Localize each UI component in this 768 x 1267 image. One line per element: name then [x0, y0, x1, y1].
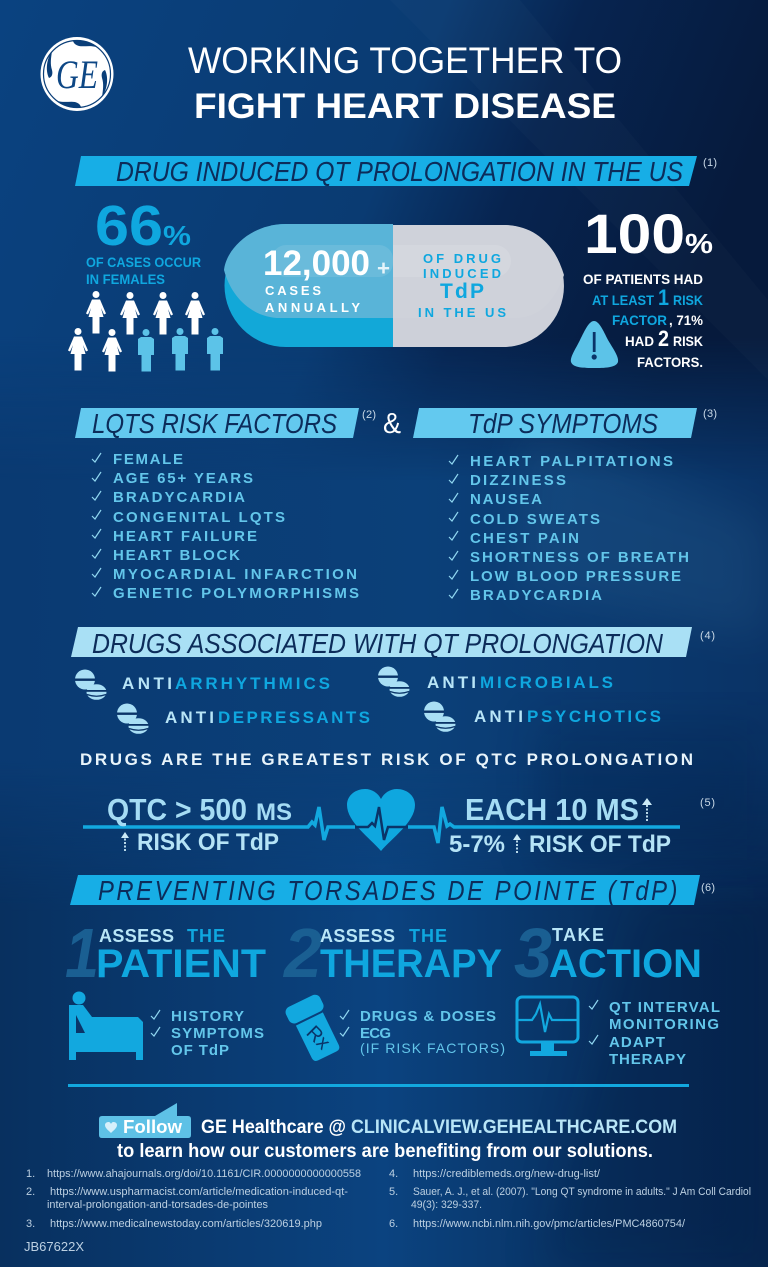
icon: GE logo — [40, 37, 114, 111]
checklist: therapy: (IF RISK FACTORS) — [360, 1040, 505, 1056]
capsule: 12,000+ cases: IN THE US — [418, 305, 506, 320]
checklist: action: ADAPT — [609, 1034, 665, 1051]
references: right: Sauer, A. J., et al. (2007). "Long QT syndrome in adults." J Am Coll Cardiol — [413, 1186, 751, 1198]
list: symptoms: LOW BLOOD PRESSURE — [470, 568, 681, 585]
checklist: patient: SYMPTOMS — [171, 1025, 264, 1042]
list: risk factors: CONGENITAL LQTS — [113, 509, 285, 526]
list: risk factors: FEMALE — [113, 451, 183, 468]
references: left: https://www.medicalnewstoday.com/articles/320619.php — [50, 1218, 322, 1230]
stat: each 10 ms: 5-7% — [449, 831, 505, 858]
stat: 100 percent: RISK — [673, 292, 703, 308]
stat: each 10 ms: (5) — [700, 797, 715, 809]
list: symptoms: SHORTNESS OF BREATH — [470, 549, 689, 566]
stat: 100 percent: 100 — [584, 202, 685, 265]
stat: each 10 ms — [449, 792, 715, 858]
icon: warning — [571, 321, 618, 368]
references: right: https://www.ncbi.nlm.nih.gov/pmc/articles/PMC4860754/ — [413, 1218, 686, 1230]
stat: each 10 ms: RISK OF TdP — [529, 831, 671, 858]
drug class: antimicrobials — [378, 666, 613, 697]
drug class: antiarrhythmics — [75, 670, 330, 700]
drug class: antipsychotics — [424, 702, 661, 732]
heading: drugs associated: (4) — [700, 630, 715, 642]
heading: drugs associated: DRUGS ASSOCIATED WITH QT PROLONGATION — [92, 628, 664, 659]
drug class: antidepressants — [117, 704, 370, 734]
step 2: assess the therapy: ASSESS — [320, 926, 395, 946]
stat: 66 percent: 66 — [95, 194, 163, 258]
checklist: therapy: ECG — [360, 1025, 391, 1042]
icon: people — [68, 291, 223, 372]
list: symptoms: NAUSEA — [470, 491, 542, 508]
capsule: 12,000+ cases: OF DRUG — [423, 251, 501, 266]
document code: JB67622X — [24, 1239, 84, 1254]
stat: 100 percent: OF PATIENTS HAD — [583, 271, 703, 287]
step 1: assess the patient — [65, 914, 266, 992]
title: WORKING TOGETHER TO — [188, 40, 622, 81]
list: risk factors — [92, 451, 359, 602]
stat: 100 percent — [583, 202, 713, 370]
heading: TdP symptoms: (3) — [703, 408, 717, 420]
list: symptoms: DIZZINESS — [470, 472, 566, 489]
follow button: Follow — [123, 1117, 183, 1137]
capsule: 12,000+ cases: + — [377, 257, 390, 280]
step 1: assess the patient: 1 — [65, 914, 99, 992]
references: left: 3. — [26, 1218, 35, 1230]
list: risk factors: MYOCARDIAL INFARCTION — [113, 566, 357, 583]
list: symptoms: CHEST PAIN — [470, 530, 579, 547]
step 1: assess the patient: PATIENT — [96, 942, 266, 986]
stat: QTc over 500 ms: QTC > 500 — [107, 792, 247, 827]
icon: ECG monitor — [517, 997, 578, 1056]
step 3: take action — [514, 914, 702, 992]
stat: 66 percent — [86, 194, 201, 287]
step 2: assess the therapy: THERAPY — [320, 942, 502, 986]
list: symptoms: COLD SWEATS — [470, 511, 600, 528]
step 2: assess the therapy: 2 — [282, 914, 322, 992]
capsule: 12,000+ cases: TdP — [440, 280, 484, 303]
references: left: interval-prolongation-and-torsades-de-pointes — [47, 1199, 268, 1211]
references: left: https://www.uspharmacist.com/article/medication-induced-qt- — [50, 1186, 348, 1198]
icon: heart — [347, 789, 415, 851]
call to action: GE Healthcare @ — [201, 1117, 346, 1138]
references: left: 1. — [26, 1168, 35, 1180]
step 3: take action: TAKE — [552, 925, 604, 945]
references: left: 2. — [26, 1186, 35, 1198]
checklist: action — [589, 999, 720, 1068]
capsule: 12,000+ cases: CASES — [265, 283, 321, 298]
list: risk factors: HEART BLOCK — [113, 547, 240, 564]
references: right: 49(3): 329-337. — [411, 1199, 482, 1211]
references: left — [26, 1168, 361, 1230]
references: right: 4. — [389, 1168, 398, 1180]
checklist: action: THERAPY — [609, 1051, 686, 1068]
list: risk factors: GENETIC POLYMORPHISMS — [113, 585, 359, 602]
heading: drug induced QT prolongation: DRUG INDUCED QT PROLONGATION IN THE US — [116, 156, 683, 187]
drug class: antimicrobials: ANTI — [427, 673, 476, 692]
call to action: CLINICALVIEW.GEHEALTHCARE.COM — [351, 1117, 677, 1138]
stat: 100 percent: FACTORS. — [637, 354, 703, 370]
step 1: assess the patient: ASSESS — [99, 926, 174, 946]
drug class: antimicrobials: MICROBIALS — [480, 673, 613, 692]
call to action: to learn how our customers are benefiting from our solutions. — [117, 1141, 653, 1162]
call to action — [117, 1117, 677, 1162]
drug class: antiarrhythmics: ARRHYTHMICS — [175, 674, 330, 693]
list: risk factors: BRADYCARDIA — [113, 489, 245, 506]
list: symptoms: HEART PALPITATIONS — [470, 453, 673, 470]
checklist: therapy: DRUGS & DOSES — [360, 1008, 496, 1025]
stat: 100 percent: FACTOR — [612, 312, 667, 328]
heading: LQTS risk factors: (2) — [362, 409, 376, 421]
heading: preventing torsades: PREVENTING TORSADES DE POINTE (TdP) — [98, 875, 680, 906]
checklist: patient: OF TdP — [171, 1042, 229, 1059]
follow button — [99, 1103, 191, 1138]
checklist: therapy — [340, 1008, 505, 1056]
checklist: action: QT INTERVAL — [609, 999, 720, 1016]
stat: 100 percent: % — [685, 228, 713, 259]
drug class: antipsychotics: ANTI — [474, 707, 523, 726]
heading: TdP symptoms: TdP SYMPTOMS — [468, 408, 658, 439]
stat: 100 percent: HAD — [625, 333, 654, 349]
stat: 100 percent: AT LEAST — [592, 292, 654, 308]
heading: drug induced QT prolongation: (1) — [703, 157, 717, 169]
divider — [68, 1084, 689, 1087]
ECG heart divider — [83, 789, 680, 851]
drug class: antidepressants: ANTI — [165, 708, 214, 727]
stat: 66 percent: OF CASES OCCUR — [86, 254, 201, 270]
stat: QTc over 500 ms — [107, 792, 292, 856]
checklist: action: MONITORING — [609, 1016, 719, 1033]
ampersand: & — [383, 408, 401, 440]
references: right: https://crediblemeds.org/new-drug-list/ — [413, 1168, 601, 1180]
stat: QTc over 500 ms: MS — [256, 799, 292, 826]
list: symptoms: BRADYCARDIA — [470, 587, 602, 604]
title — [188, 40, 622, 126]
stat: 66 percent: IN FEMALES — [86, 271, 165, 287]
list: risk factors: HEART FAILURE — [113, 528, 257, 545]
list: symptoms — [449, 453, 689, 604]
stat: each 10 ms: EACH 10 MS — [465, 792, 639, 827]
references: right: 5. — [389, 1186, 398, 1198]
checklist: patient: HISTORY — [171, 1008, 244, 1025]
statement: greatest risk: DRUGS ARE THE GREATEST RISK OF QTC PROLONGATION — [80, 750, 693, 769]
drug class: antiarrhythmics: ANTI — [122, 674, 172, 693]
heading: LQTS risk factors: LQTS RISK FACTORS — [92, 408, 337, 439]
stat: 100 percent: 1 — [658, 285, 669, 310]
text: Rx label: Rx — [302, 1022, 334, 1054]
stat: 100 percent: , 71% — [669, 312, 704, 328]
capsule: 12,000+ cases: INDUCED — [423, 266, 501, 281]
text: GE monogram: GE — [56, 52, 98, 97]
stat: 100 percent: 2 — [658, 326, 669, 351]
drug class: antidepressants: DEPRESSANTS — [218, 708, 370, 727]
heading: preventing torsades: (6) — [701, 882, 715, 894]
stat: 100 percent: RISK — [673, 333, 703, 349]
step 3: take action: 3 — [514, 914, 552, 992]
checklist: patient — [151, 1008, 264, 1059]
step 1: assess the patient: THE — [187, 926, 225, 946]
capsule: 12,000+ cases: 12,000 — [263, 244, 370, 283]
icon: patient in bed — [69, 992, 143, 1060]
title: FIGHT HEART DISEASE — [194, 87, 616, 126]
stat: QTc over 500 ms: RISK OF TdP — [137, 829, 279, 856]
stat: 66 percent: % — [163, 220, 191, 251]
step 2: assess the therapy — [282, 914, 502, 992]
references: right: 6. — [389, 1218, 398, 1230]
drug class: antipsychotics: PSYCHOTICS — [527, 707, 661, 726]
capsule: 12,000+ cases — [224, 224, 564, 347]
icon: prescription bottle — [284, 993, 344, 1064]
references: left: https://www.ahajournals.org/doi/10.1161/CIR.0000000000000558 — [47, 1168, 361, 1180]
step 3: take action: ACTION — [549, 942, 702, 986]
capsule: 12,000+ cases: ANNUALLY — [265, 300, 360, 315]
references: right — [389, 1168, 751, 1230]
step 2: assess the therapy: THE — [409, 926, 447, 946]
list: risk factors: AGE 65+ YEARS — [113, 470, 253, 487]
